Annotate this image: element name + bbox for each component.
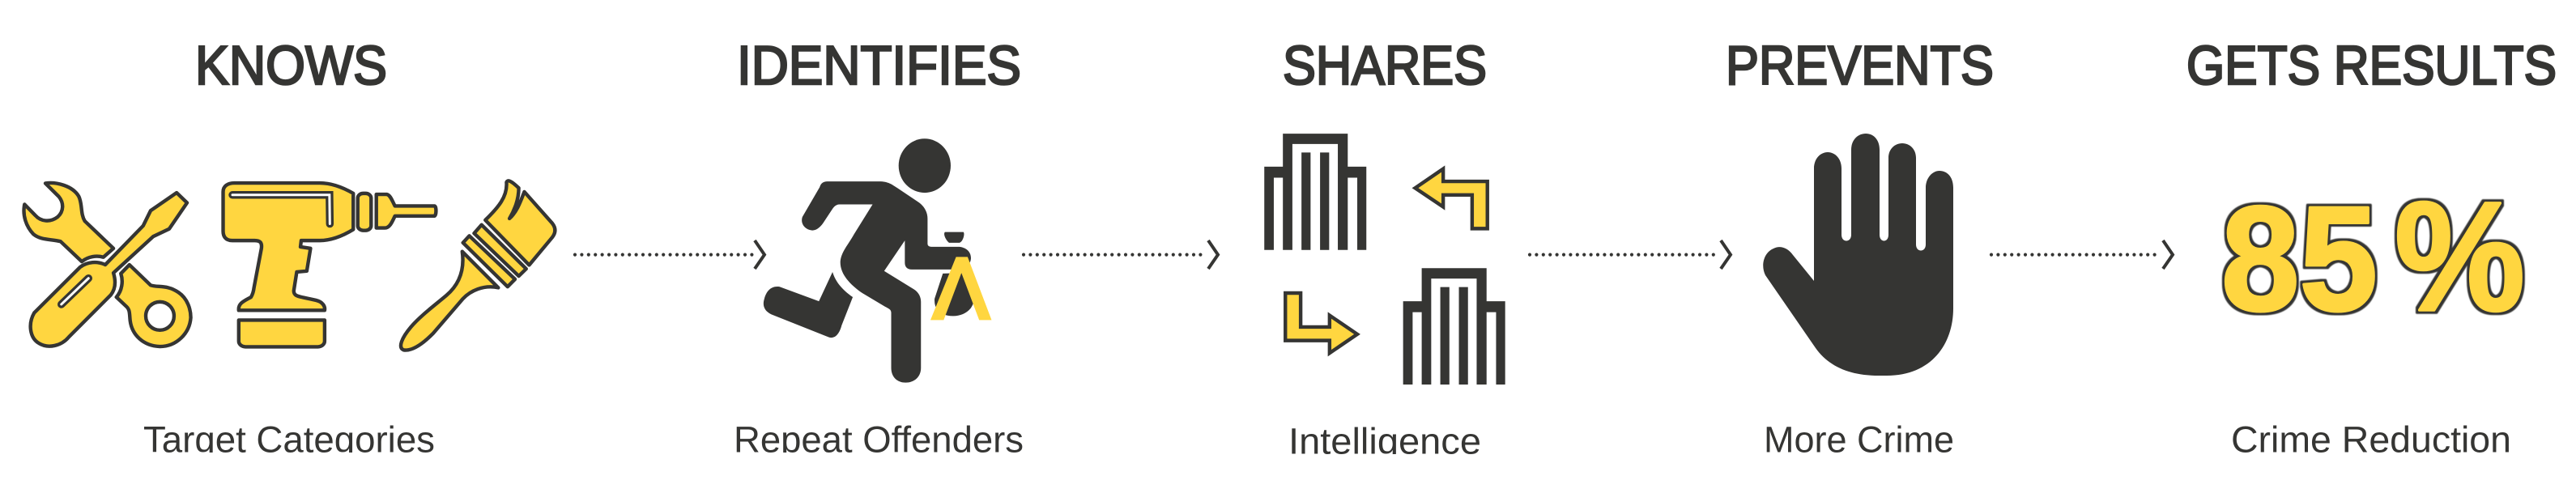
heading: knows: KNOWS: [195, 35, 387, 96]
label: target categories: Target Categories: [143, 419, 435, 460]
icon: power drill: [224, 183, 436, 346]
big number: 85 percent: %: [2395, 169, 2525, 343]
arrow: shares to prevents: [1530, 240, 1731, 269]
label: crime reduction: Crime Reduction: [2231, 419, 2511, 460]
icon: running thief with bag: [764, 138, 991, 383]
icon: buildings exchanging arrows: [1264, 134, 1505, 385]
label: more crime: More Crime: [1764, 419, 1954, 460]
panel: gets results: [2186, 35, 2557, 460]
heading: identifies: IDENTIFIES: [737, 35, 1021, 96]
arrow: knows to identifies: [575, 240, 764, 269]
label: repeat offenders: Repeat Offenders: [734, 419, 1024, 460]
panel: knows: [24, 35, 555, 460]
icon: raised stop hand: [1763, 134, 1953, 376]
panel: shares: [1264, 35, 1505, 461]
icon: paint brush: [401, 181, 555, 351]
arrow: identifies to shares: [1024, 240, 1218, 269]
icon: crossed wrench and screwdriver: [24, 183, 191, 346]
big number: 85 percent: [2221, 169, 2525, 343]
heading: prevents: PREVENTS: [1726, 35, 1994, 96]
big number: 85 percent: 85: [2221, 175, 2378, 342]
label: intelligence: Intelligence: [1288, 421, 1481, 461]
arrow: prevents to gets results: [1991, 240, 2173, 269]
panel: identifies: [734, 35, 1024, 460]
heading: shares: SHARES: [1283, 35, 1487, 96]
panel: prevents: [1726, 35, 1994, 460]
